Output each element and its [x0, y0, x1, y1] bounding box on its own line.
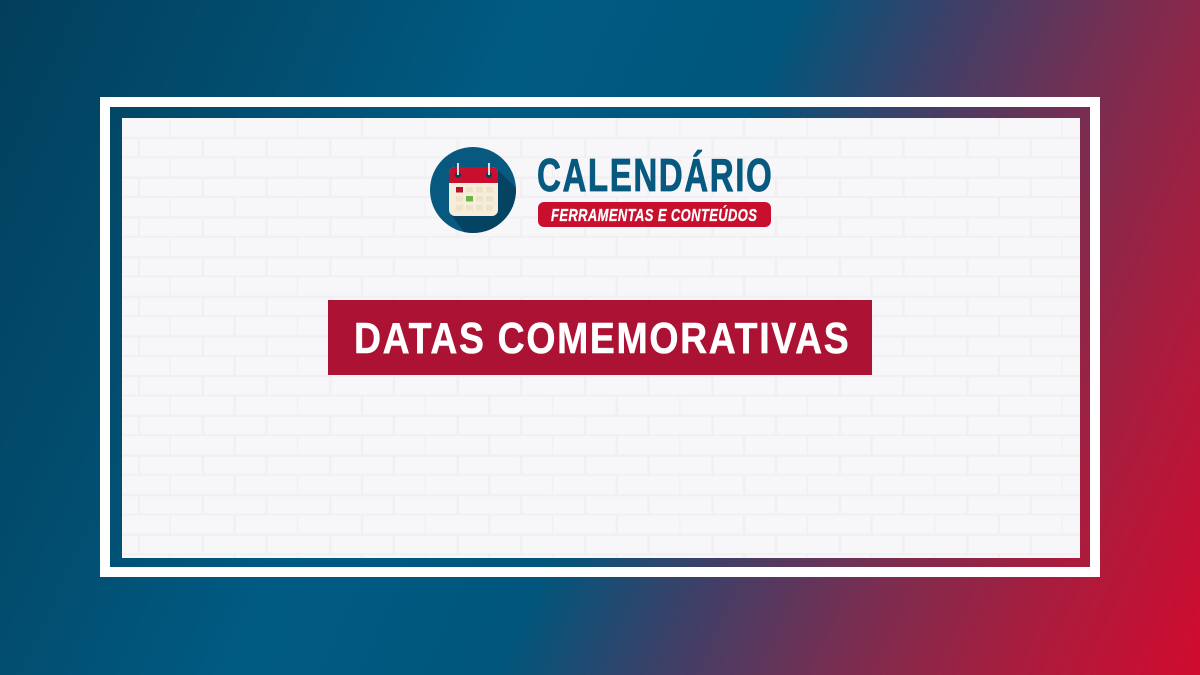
logo tagline pill: FERRAMENTAS E CONTEÚDOS: [551, 204, 757, 226]
logo tagline pill: [538, 202, 771, 227]
brick wall panel: [122, 118, 1080, 558]
white frame: [105, 102, 1095, 572]
title banner: DATAS COMEMORATIVAS: [354, 313, 849, 363]
logo: [430, 147, 772, 240]
logo wordmark: CALENDÁRIO: [537, 150, 772, 201]
icon: calendar badge: [430, 147, 516, 233]
title banner: [328, 300, 872, 375]
